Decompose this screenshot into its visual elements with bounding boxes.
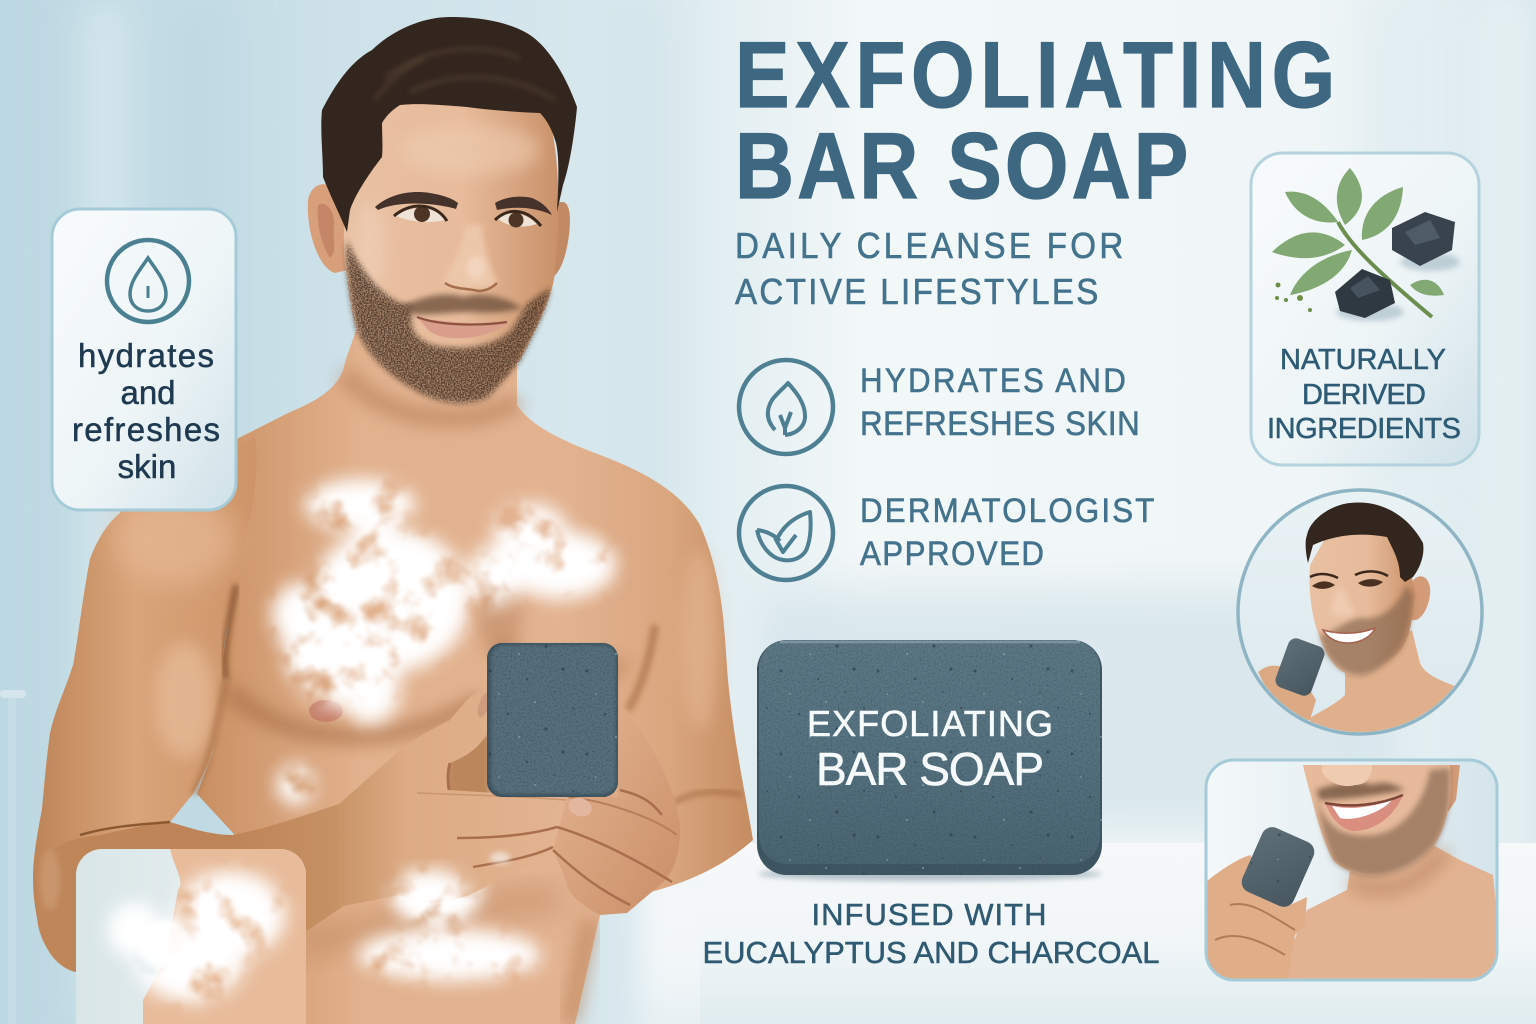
card text: hydrates bbox=[78, 337, 214, 374]
neck and chest bbox=[1288, 846, 1496, 978]
benefit: dermatologist approved: DERMATOLOGIST bbox=[860, 491, 1154, 529]
hand bbox=[1206, 855, 1307, 982]
icon: water drop bbox=[107, 240, 189, 322]
eyebrows bbox=[375, 192, 458, 210]
right card: naturally derived ingredients bbox=[1251, 153, 1479, 465]
right card: naturally derived ingredients: NATURALLY bbox=[1280, 344, 1446, 376]
body shading bbox=[115, 372, 742, 1024]
face bbox=[1309, 530, 1415, 675]
mouth and teeth bbox=[1325, 795, 1403, 831]
eyes bbox=[394, 206, 541, 228]
nose bbox=[1322, 765, 1372, 786]
hand and soap bbox=[1258, 666, 1316, 720]
benefit: dermatologist approved: APPROVED bbox=[860, 534, 1044, 572]
soap label bbox=[807, 703, 1053, 795]
hand foam bbox=[392, 869, 468, 921]
left hand bbox=[338, 691, 568, 907]
title bbox=[735, 22, 1335, 218]
big soap bar bbox=[757, 640, 1102, 881]
icon: eucalyptus sprig and charcoal bbox=[1272, 168, 1460, 321]
eyes and brows bbox=[1312, 579, 1383, 589]
caption bbox=[702, 897, 1160, 970]
ears bbox=[308, 184, 347, 273]
left upper arm bbox=[33, 437, 257, 972]
benefit: hydrates and refreshes skin: HYDRATES AND bbox=[860, 361, 1126, 399]
torso and right arm bbox=[197, 325, 753, 1024]
nose bbox=[443, 225, 497, 291]
man: main figure bbox=[33, 17, 753, 1024]
right card: naturally derived ingredients: INGREDIENTS bbox=[1267, 413, 1461, 445]
right card: naturally derived ingredients: DERIVED bbox=[1302, 379, 1426, 411]
ear bbox=[1448, 765, 1460, 812]
crossing forearm bbox=[36, 797, 360, 972]
title: EXFOLIATING bbox=[735, 22, 1335, 127]
face bbox=[344, 95, 558, 403]
face bbox=[1303, 765, 1451, 876]
smile bbox=[1323, 628, 1375, 643]
head bbox=[308, 17, 577, 403]
subtitle: DAILY CLEANSE FOR bbox=[735, 227, 1123, 266]
soap label: BAR SOAP bbox=[816, 743, 1044, 795]
caption: EUCALYPTUS AND CHARCOAL bbox=[702, 935, 1160, 970]
card text bbox=[72, 337, 220, 485]
mouth bbox=[417, 317, 507, 338]
soap in hand bbox=[487, 643, 618, 797]
nipple bbox=[309, 700, 343, 722]
neck and shoulders bbox=[1310, 630, 1454, 732]
left card: hydrates and refreshes skin bbox=[52, 209, 236, 510]
caption: INFUSED WITH bbox=[812, 897, 1046, 932]
inset: foam on skin bbox=[76, 849, 306, 1024]
card text: and bbox=[120, 374, 176, 411]
card text: refreshes bbox=[72, 411, 220, 448]
subtitle: ACTIVE LIFESTYLES bbox=[735, 273, 1098, 312]
circular photo: man holding soap bbox=[1238, 490, 1482, 745]
stubble bbox=[1316, 768, 1450, 876]
benefit: dermatologist approved bbox=[739, 486, 1154, 580]
right hand bbox=[553, 705, 680, 915]
ear bbox=[1412, 576, 1430, 620]
soap label: EXFOLIATING bbox=[807, 703, 1053, 744]
card text: skin bbox=[118, 448, 176, 485]
icon: leaf check bbox=[739, 486, 833, 580]
chest foam bbox=[272, 479, 616, 981]
hair bbox=[321, 17, 577, 232]
beard stubble bbox=[347, 240, 550, 403]
icon: leaf drop bbox=[739, 360, 833, 454]
photo: smiling man with soap bbox=[1206, 760, 1500, 985]
benefit: hydrates and refreshes skin: REFRESHES SKIN bbox=[860, 404, 1140, 442]
title: BAR SOAP bbox=[735, 113, 1188, 218]
soap bbox=[1242, 827, 1314, 907]
benefit: hydrates and refreshes skin bbox=[739, 360, 1140, 454]
subtitle bbox=[735, 227, 1123, 312]
hair bbox=[1306, 502, 1423, 582]
nose bbox=[1330, 589, 1354, 617]
